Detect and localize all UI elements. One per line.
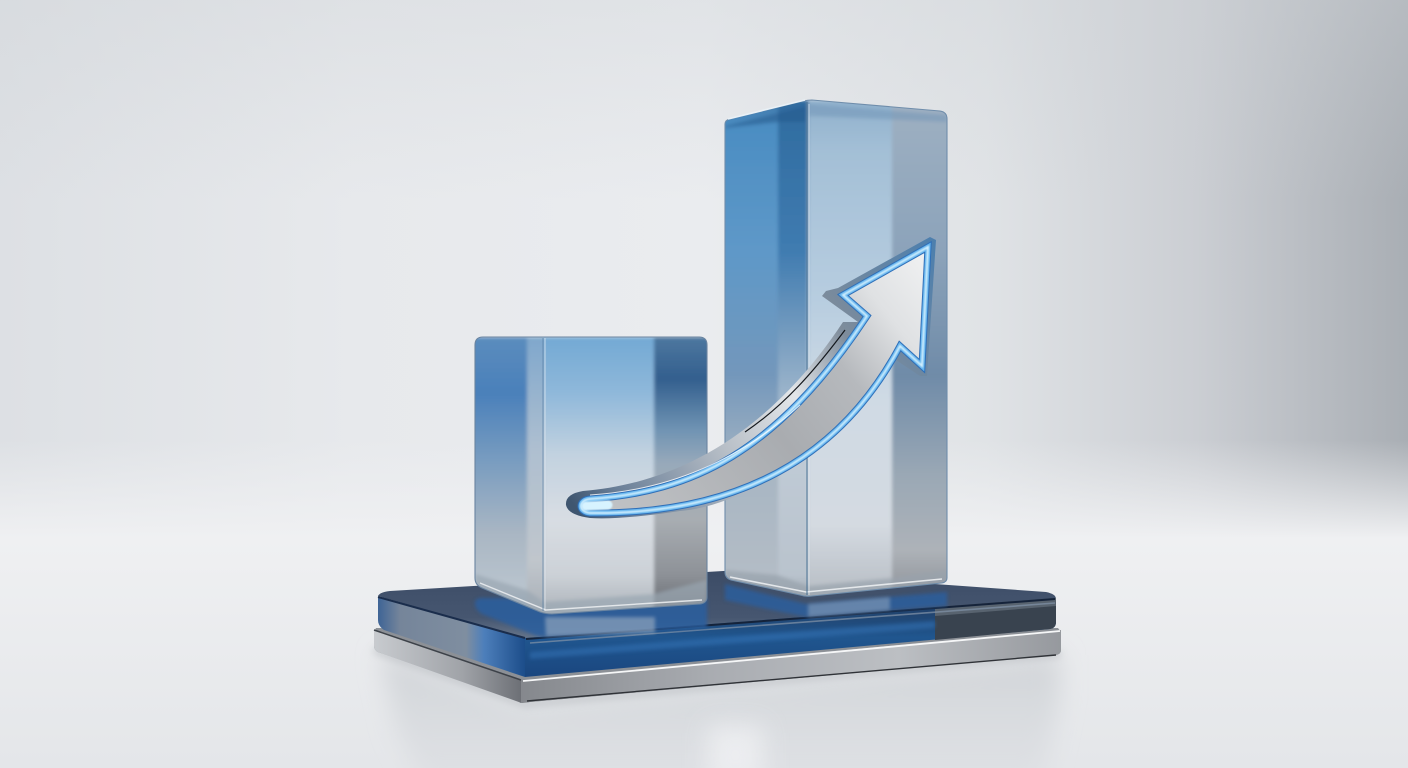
bar face: left (476, 338, 530, 606)
bar face: inner band (527, 337, 544, 617)
arrow: neon outline (581, 247, 928, 513)
bar face: left (726, 107, 781, 590)
bar face: centre (808, 100, 892, 600)
glass plate: top surface (378, 570, 1056, 638)
floor reflection (374, 650, 1060, 768)
glass plate: left face (378, 597, 525, 677)
left short glass bar (465, 337, 717, 620)
metal base plate (374, 628, 1061, 703)
bar face: right (651, 338, 706, 606)
arrow: metallic side (566, 237, 936, 518)
arrow: dark rim line (745, 330, 845, 432)
bar face: centre (544, 337, 654, 617)
bar face: inner band (778, 100, 808, 600)
bar face: right (890, 108, 946, 588)
arrow: face (581, 247, 928, 513)
base platform (374, 570, 1061, 703)
arrow: tail glow (586, 505, 608, 506)
glass plate: front face (378, 597, 1056, 677)
rising arrow (566, 237, 936, 518)
right tall glass bar (715, 100, 957, 600)
bar reflections on plate (475, 584, 947, 637)
